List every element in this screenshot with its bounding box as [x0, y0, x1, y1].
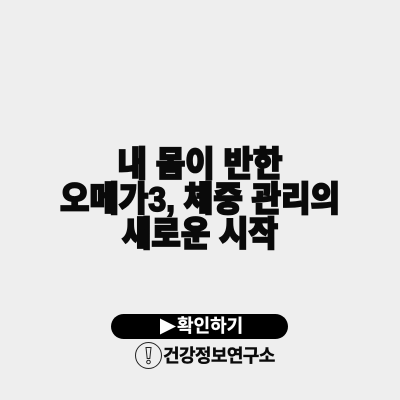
brand name: 건강정보연구소	[163, 346, 275, 366]
title	[60, 145, 340, 253]
icon: exclamation circle	[135, 342, 162, 369]
title: 오메가3, 체중 관리의	[60, 180, 340, 218]
confirm button	[111, 314, 288, 339]
title: 새로운 시작	[122, 215, 278, 253]
title: 내 몸이 반한	[118, 145, 282, 183]
brand logo	[135, 342, 275, 369]
button label: 확인하기	[177, 316, 243, 336]
icon: play triangle	[160, 318, 176, 334]
